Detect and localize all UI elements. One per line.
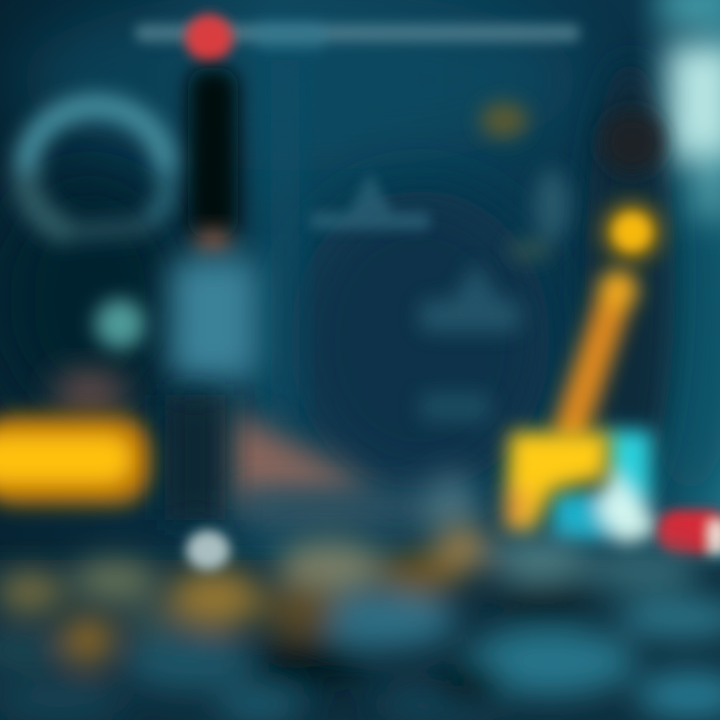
blue column block [170,258,258,380]
white coin [186,530,230,570]
yellow horizontal bar [0,415,154,505]
coin field [0,526,720,720]
brown blob [52,370,128,414]
salmon triangle [226,408,378,502]
cyan chart block [552,430,662,552]
yellow chart block [504,432,610,535]
red circle marker [185,14,233,62]
grey blob [240,473,478,537]
orange column joint [195,228,231,256]
yellow ball [602,202,662,262]
centre text block [420,262,520,332]
gauge arc [26,106,167,232]
dark pedestal [165,395,225,520]
dark vertical column [188,68,238,238]
dark ball [600,110,664,174]
title bar [135,20,580,50]
teal dot [95,299,145,349]
lower text block [420,392,490,422]
centre triangle icon [310,172,430,230]
orange rising line [572,270,638,425]
right text icons [480,102,570,260]
light corner panel [660,0,720,220]
red chart block [658,510,720,558]
